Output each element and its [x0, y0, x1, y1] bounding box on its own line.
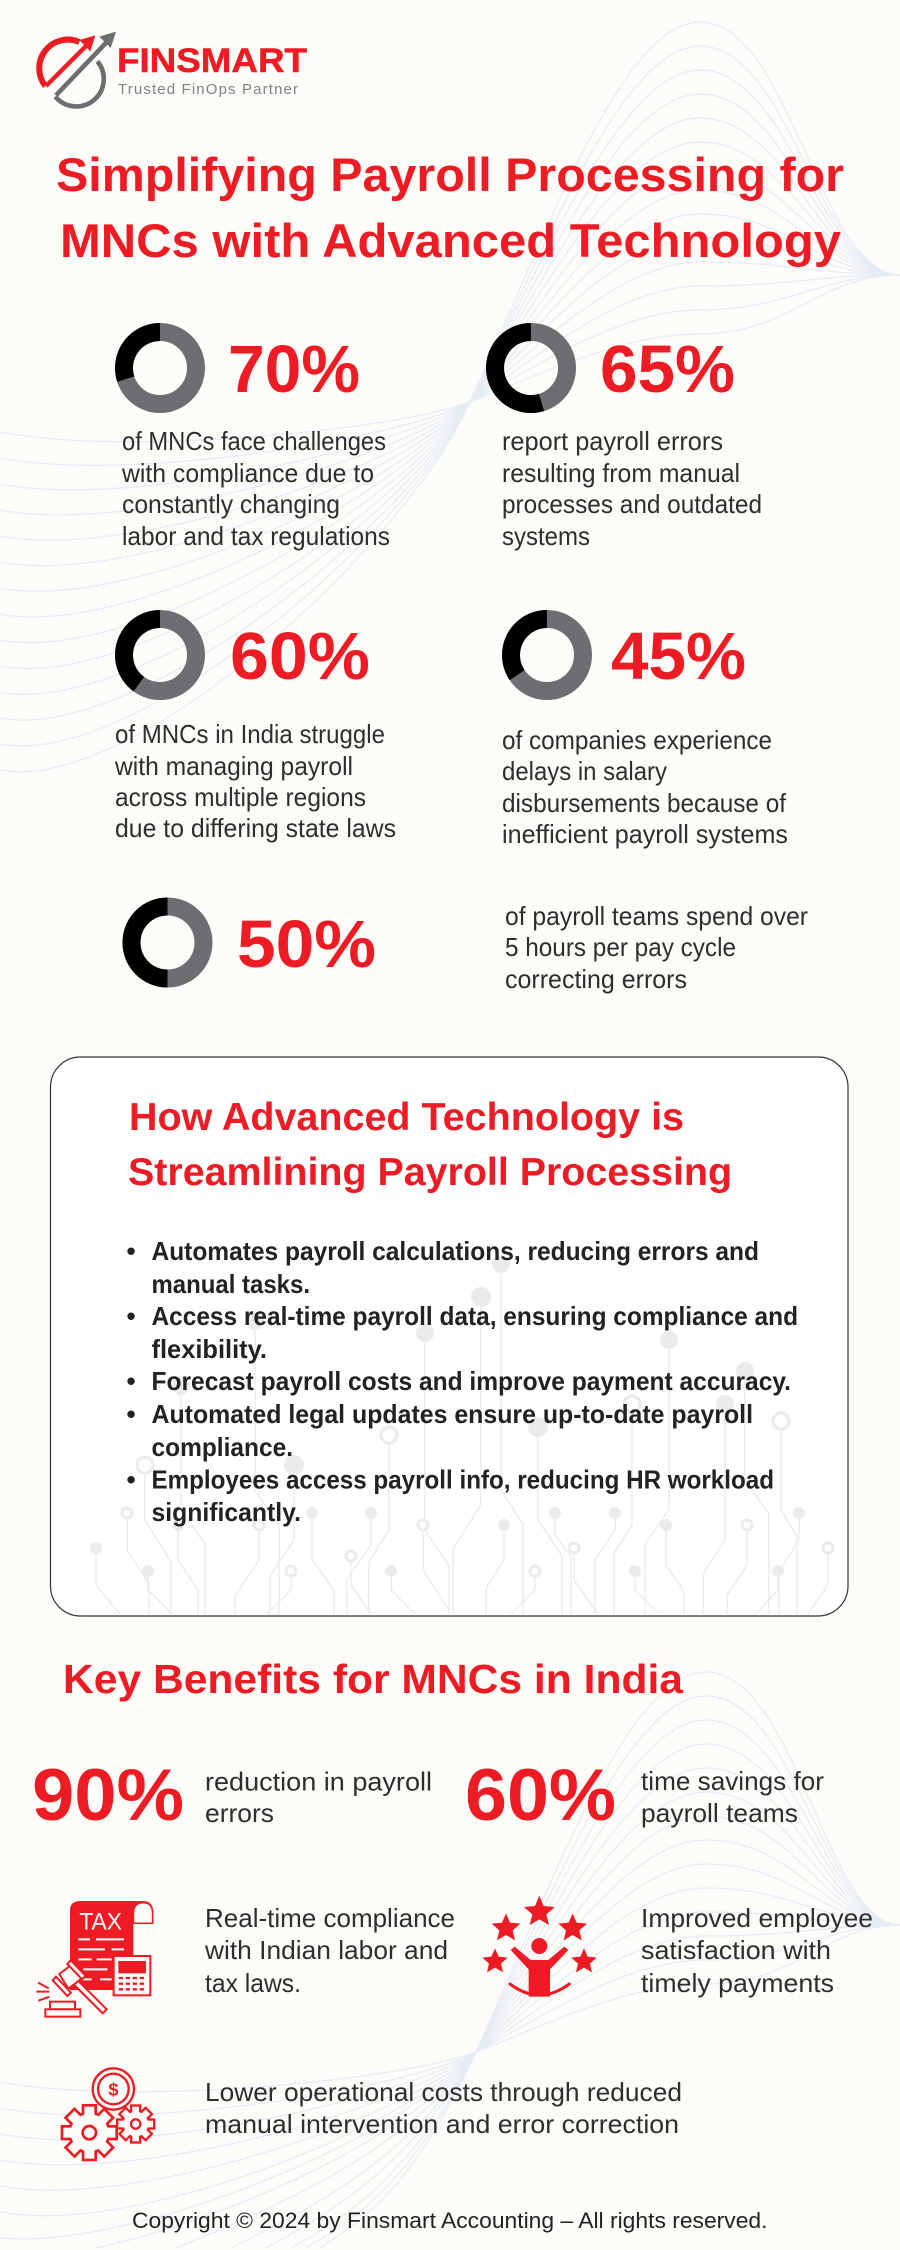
icon: tax document, gavel and calculator: TAX: [79, 1908, 122, 1935]
donut chart 60: [110, 605, 210, 705]
description 70%: labor and tax regulations: [122, 521, 390, 551]
description 70%: with compliance due to: [121, 458, 374, 488]
value 45%: 45%: [611, 619, 746, 694]
description 65%: report payroll errors: [502, 426, 723, 456]
description 45%: of companies experience: [502, 725, 772, 755]
description: manual intervention and error correction: [205, 2109, 679, 2139]
icon: gears and coin: [63, 2068, 153, 2159]
benefit: 60% time savings: [465, 1755, 824, 1836]
description 70%: of MNCs face challenges: [122, 426, 386, 456]
value 70%: 70%: [228, 332, 360, 407]
stat: 65%: [486, 323, 762, 551]
panel heading: Streamlining Payroll Processing: [128, 1151, 732, 1194]
description: [641, 1903, 873, 1998]
stat: 50%: [132, 901, 808, 994]
logo tagline: Trusted FinOps Partner: [118, 81, 298, 98]
description: timely payments: [641, 1968, 834, 1998]
description 60%: [114, 719, 396, 843]
logo wordmark: FINSMART: [117, 42, 307, 80]
description 70%: [121, 426, 390, 551]
description: time savings for: [641, 1766, 824, 1796]
description 70%: constantly changing: [122, 489, 340, 519]
logo: Finsmart: [39, 32, 307, 106]
description 65%: systems: [502, 521, 590, 551]
bullet list: •: [126, 1464, 136, 1494]
circuit board pattern: [90, 1255, 833, 1614]
bullet list: compliance.: [152, 1432, 293, 1462]
footer: copyright: Copyright © 2024 by Finsmart Accounting – All rights reserved.: [132, 2208, 768, 2233]
description 60%: of MNCs in India struggle: [115, 719, 385, 749]
icon: gears and coin: $: [108, 2079, 118, 2099]
value 90%: 90%: [32, 1755, 184, 1836]
bullet list: Automates payroll calculations, reducing errors and: [152, 1236, 759, 1266]
value 60%: 60%: [230, 619, 370, 694]
logo icon: [39, 32, 116, 106]
description: Real-time compliance: [205, 1903, 455, 1933]
bullet list: •: [126, 1366, 136, 1396]
value 65%: 65%: [600, 332, 735, 407]
description 45%: inefficient payroll systems: [502, 819, 788, 849]
description 50%: [505, 901, 808, 994]
benefit: 90% reduction: [32, 1755, 432, 1836]
bullet list: Employees access payroll info, reducing HR workload: [152, 1464, 774, 1494]
panel: how advanced technology is streamlining payroll processing: [50, 1057, 848, 1616]
description: with Indian labor and: [204, 1935, 448, 1965]
description: tax laws.: [205, 1968, 301, 1998]
description: Improved employee: [641, 1903, 873, 1933]
panel heading: How Advanced Technology is: [129, 1096, 684, 1139]
description 45%: [502, 725, 788, 849]
description: reduction in payroll: [205, 1766, 432, 1796]
description 45%: disbursements because of: [502, 788, 787, 818]
donut chart 65: [486, 323, 576, 413]
donut chart 70: [115, 323, 205, 413]
heading: key benefits: Key Benefits for MNCs in India: [63, 1656, 684, 1702]
bullet list: Access real-time payroll data, ensuring compliance and: [152, 1301, 798, 1331]
donut chart 45: [497, 605, 597, 705]
benefit: lower operational costs: [63, 2068, 682, 2159]
bullet list: manual tasks.: [152, 1269, 310, 1299]
value 60%: 60%: [465, 1755, 616, 1836]
background wave lines: bottom: [0, 1672, 900, 2248]
description: satisfaction with: [641, 1935, 831, 1965]
panel frame: [50, 1057, 848, 1616]
description 65%: resulting from manual: [502, 458, 740, 488]
benefit: employee satisfaction: [482, 1896, 873, 1998]
bullet list: •: [126, 1301, 136, 1331]
description 60%: with managing payroll: [114, 751, 353, 781]
bullet list: Automated legal updates ensure up-to-date payroll: [152, 1399, 753, 1429]
panel heading: [128, 1096, 732, 1194]
value 50%: 50%: [237, 907, 376, 982]
description: payroll teams: [641, 1798, 798, 1828]
description 50%: of payroll teams spend over: [505, 901, 808, 931]
icon: person with stars: [482, 1896, 597, 1997]
background wave lines: top: [0, 22, 900, 772]
description 65%: [502, 426, 762, 551]
description: [641, 1766, 824, 1828]
bullet list: flexibility.: [152, 1334, 267, 1364]
description: [204, 1903, 455, 1998]
stat: 60%: [110, 605, 396, 843]
bullet list: significantly.: [152, 1497, 301, 1527]
description 45%: delays in salary: [502, 756, 667, 786]
stat: 45%: [497, 605, 788, 849]
bullet list: [126, 1236, 798, 1527]
title: [56, 148, 844, 267]
benefit: real-time compliance: [36, 1901, 455, 2017]
description 50%: 5 hours per pay cycle: [505, 932, 736, 962]
title: Simplifying Payroll Processing for: [56, 148, 844, 201]
description: [205, 1766, 432, 1828]
description 60%: due to differing state laws: [115, 813, 396, 843]
description 60%: across multiple regions: [115, 782, 366, 812]
bullet list: •: [126, 1236, 136, 1266]
icon: tax document, gavel and calculator: [36, 1901, 153, 2017]
description: Lower operational costs through reduced: [205, 2077, 682, 2107]
bullet list: •: [126, 1399, 136, 1429]
stat: 70%: [115, 323, 390, 551]
description 65%: processes and outdated: [502, 489, 762, 519]
description 50%: correcting errors: [505, 964, 687, 994]
description: errors: [205, 1798, 274, 1828]
description: [205, 2077, 682, 2139]
donut chart 50: [132, 906, 204, 978]
title: MNCs with Advanced Technology: [60, 214, 841, 267]
bullet list: Forecast payroll costs and improve payment accuracy.: [152, 1366, 791, 1396]
